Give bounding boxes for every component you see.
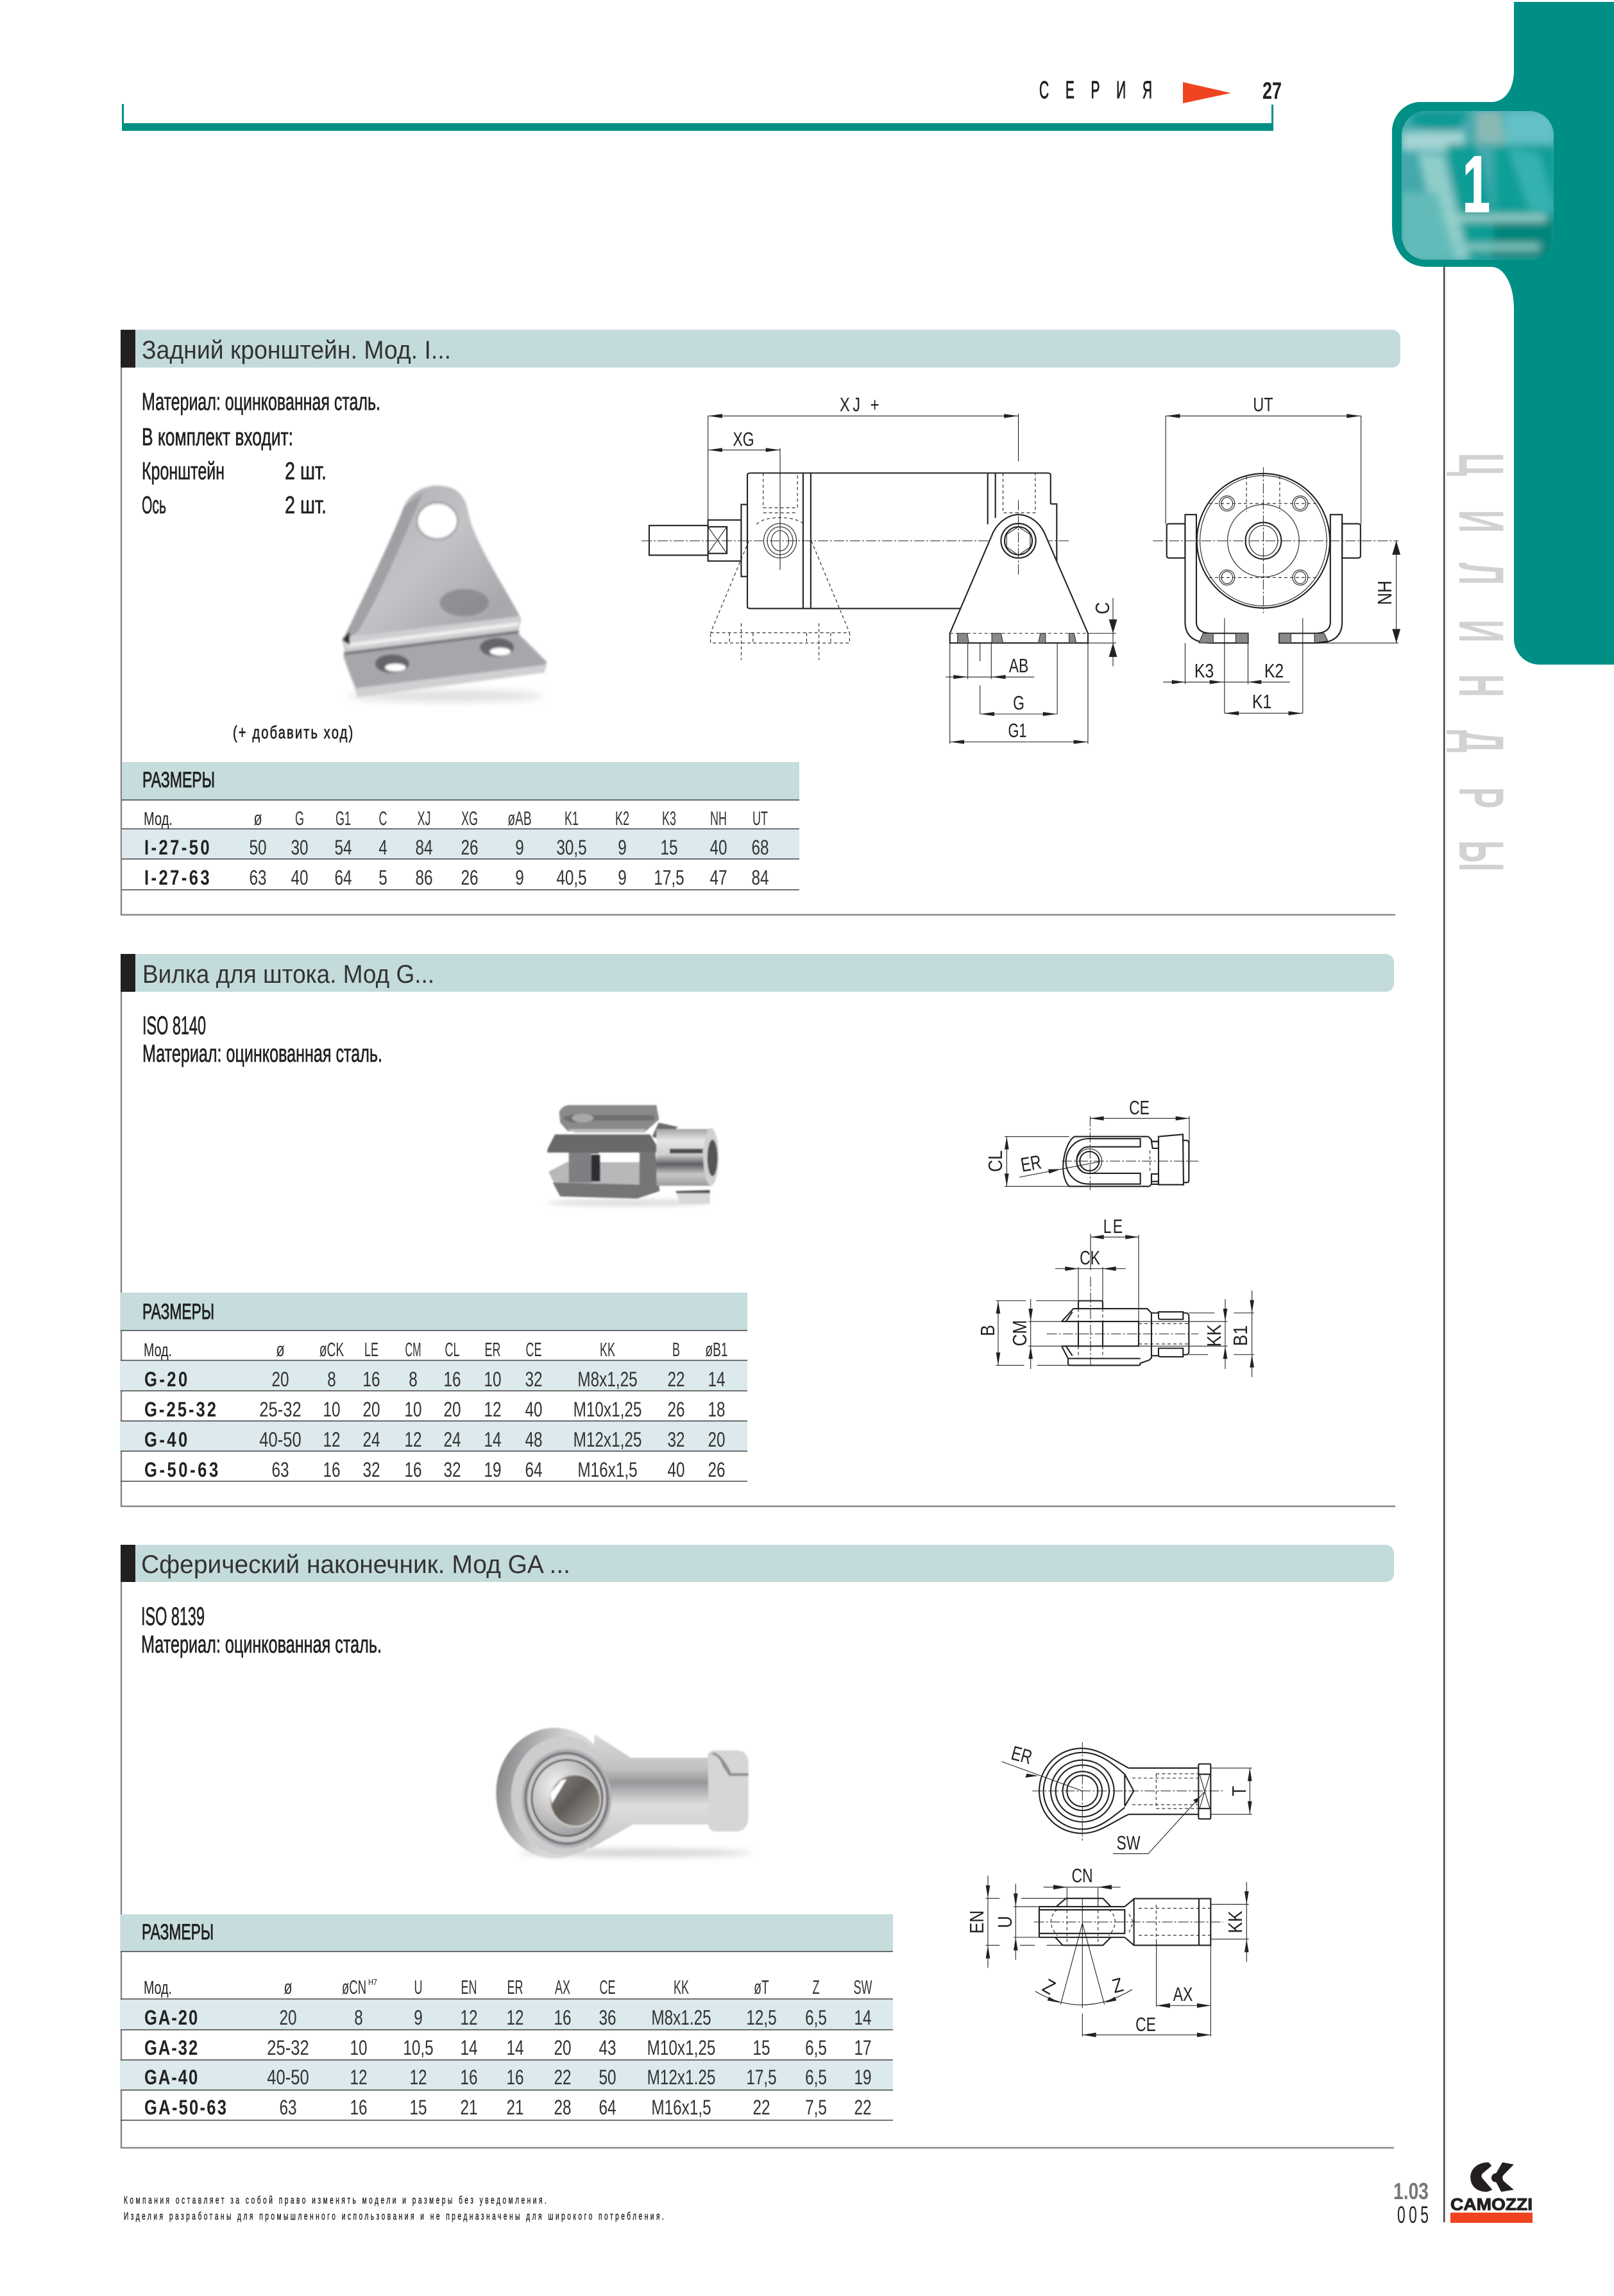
description: В комплект входит: bbox=[142, 424, 293, 451]
table: dimensions I: 15 bbox=[660, 837, 678, 860]
table: dimensions I: 47 bbox=[709, 867, 727, 890]
table: dimensions G: 32 bbox=[443, 1459, 461, 1482]
table: dimensions GA: 12 bbox=[506, 2007, 524, 2030]
table: dimensions GA: M10x1,25 bbox=[647, 2037, 715, 2060]
table: dimensions G bbox=[121, 1293, 747, 1482]
section tab image: teal texture tile bbox=[1402, 111, 1556, 260]
table: dimensions I: XJ bbox=[418, 808, 430, 829]
table: dimensions GA: 16 bbox=[554, 2007, 572, 2030]
description: 2 шт. bbox=[285, 458, 327, 485]
table: dimensions GA: 9 bbox=[414, 2007, 423, 2030]
table: dimensions GA: GA-50-63 bbox=[144, 2096, 226, 2120]
drawing: cylinder with rear bracket: NH bbox=[1374, 581, 1397, 605]
table: dimensions I: C bbox=[379, 808, 387, 829]
table: dimensions G: 12 bbox=[404, 1429, 422, 1452]
heading bar bbox=[121, 954, 1394, 992]
table: dimensions I: 84 bbox=[415, 837, 433, 860]
section tab: teal side tab bbox=[1392, 2, 1614, 665]
table: dimensions I: I-27-63 bbox=[144, 867, 210, 890]
table: dimensions GA: M8x1.25 bbox=[651, 2007, 711, 2030]
drawing: rod end: EN bbox=[966, 1910, 989, 1934]
table: dimensions G: 24 bbox=[362, 1429, 380, 1452]
table: dimensions G: 32 bbox=[362, 1459, 380, 1482]
table: dimensions GA: øCN bbox=[342, 1977, 366, 1998]
table: dimensions GA: 21 bbox=[460, 2096, 478, 2120]
description: Ось bbox=[142, 492, 166, 519]
table: dimensions G: 40-50 bbox=[259, 1429, 302, 1452]
table: dimensions G: 24 bbox=[443, 1429, 461, 1452]
heading: Сферический наконечник. Мод GA ... bbox=[141, 1551, 570, 1579]
table: dimensions G: CL bbox=[445, 1339, 459, 1361]
drawing: clevis: CK bbox=[1080, 1246, 1100, 1269]
drawing: rod end: ER bbox=[1009, 1741, 1035, 1769]
table: dimensions G: Мод. bbox=[144, 1340, 172, 1361]
drawing: rod end: CE bbox=[1135, 2013, 1156, 2036]
header: series number: 27 bbox=[1262, 78, 1282, 104]
description: Материал: оцинкованная сталь. bbox=[142, 389, 380, 416]
table: dimensions GA: 14 bbox=[506, 2037, 524, 2060]
table: dimensions I: G1 bbox=[336, 808, 351, 829]
table: dimensions G: 18 bbox=[708, 1399, 726, 1422]
table: dimensions GA: 36 bbox=[599, 2007, 616, 2030]
table: dimensions GA: 14 bbox=[460, 2037, 478, 2060]
icon: red arrow bbox=[1183, 82, 1231, 103]
heading: Задний кронштейн. Мод. I... bbox=[142, 336, 451, 364]
description: Материал: оцинкованная сталь. bbox=[141, 1631, 382, 1658]
panel: rod clevis bbox=[121, 954, 1395, 1506]
heading marker bbox=[121, 330, 135, 368]
drawing: clevis: ER bbox=[1019, 1150, 1043, 1176]
table: dimensions G: CE bbox=[526, 1339, 541, 1361]
table: dimensions GA: 10 bbox=[350, 2037, 368, 2060]
table: dimensions G: 12 bbox=[323, 1429, 341, 1452]
table: dimensions GA: U bbox=[414, 1977, 422, 1998]
table: dimensions I: 40,5 bbox=[556, 867, 587, 890]
table: dimensions G: 20 bbox=[443, 1399, 461, 1422]
table: dimensions G: 19 bbox=[484, 1459, 502, 1482]
table: dimensions GA: GA-20 bbox=[144, 2007, 198, 2030]
panel outline bbox=[121, 368, 1395, 915]
description bbox=[142, 1012, 382, 1067]
photo: bracket bbox=[342, 486, 547, 701]
table: dimensions I: 30 bbox=[291, 837, 309, 860]
table: dimensions G: 32 bbox=[525, 1368, 543, 1391]
table: dimensions G: M16x1,5 bbox=[577, 1459, 638, 1482]
drawing: rod end: KK bbox=[1225, 1910, 1247, 1934]
table: dimensions GA: KK bbox=[674, 1977, 689, 1998]
table: dimensions I: 5 bbox=[378, 867, 387, 890]
footer: revision: 1.03 bbox=[1393, 2178, 1429, 2204]
description: Кронштейн bbox=[142, 458, 225, 485]
side label: cylinders: ЦИЛИНДРЫ bbox=[1445, 453, 1517, 871]
table: dimensions G: B bbox=[672, 1339, 680, 1361]
table: dimensions I: 68 bbox=[751, 837, 769, 860]
table: dimensions GA bbox=[121, 1914, 893, 2120]
table: dimensions G: 20 bbox=[362, 1399, 380, 1422]
table: dimensions GA: 20 bbox=[279, 2007, 297, 2030]
drawing: rod end: Z bbox=[1039, 1975, 1058, 2000]
drawing: cylinder with rear bracket: G bbox=[1013, 692, 1024, 714]
description: Материал: оцинкованная сталь. bbox=[142, 1041, 382, 1067]
table: dimensions GA: 63 bbox=[279, 2096, 297, 2120]
table: dimensions G: 20 bbox=[271, 1368, 289, 1391]
table: dimensions G: 10 bbox=[484, 1368, 502, 1391]
table: dimensions G: 40 bbox=[667, 1459, 685, 1482]
table: dimensions GA: 6,5 bbox=[805, 2066, 827, 2089]
table: dimensions G: 48 bbox=[525, 1429, 543, 1452]
table: dimensions GA: 21 bbox=[506, 2096, 524, 2120]
table: dimensions I: 30,5 bbox=[556, 837, 587, 860]
table: dimensions G: 26 bbox=[708, 1459, 726, 1482]
table: dimensions G: 22 bbox=[667, 1368, 685, 1391]
table: dimensions I: 50 bbox=[249, 837, 267, 860]
table: dimensions GA: SW bbox=[854, 1977, 872, 1998]
description: ISO 8139 bbox=[141, 1603, 205, 1631]
description: ISO 8140 bbox=[142, 1012, 206, 1040]
drawing: clevis: LE bbox=[1103, 1215, 1124, 1237]
table: dimensions GA: 64 bbox=[599, 2096, 616, 2120]
table: dimensions I: NH bbox=[710, 808, 727, 829]
drawing: cylinder with rear bracket: UT bbox=[1253, 393, 1273, 416]
table: dimensions GA: 15 bbox=[409, 2096, 427, 2120]
table: dimensions GA: 12,5 bbox=[746, 2007, 777, 2030]
table: dimensions GA: CE bbox=[600, 1977, 615, 1998]
side vertical rule bbox=[1443, 267, 1445, 2222]
table: dimensions GA: 20 bbox=[554, 2037, 572, 2060]
footer: page number: 005 bbox=[1397, 2201, 1429, 2228]
drawing: clevis: CL bbox=[985, 1150, 1007, 1172]
footer disclaimer: Компания оставляет за собой право изменять модели и размеры без уведомления. bbox=[124, 2193, 547, 2206]
table: dimensions GA: 50 bbox=[599, 2066, 616, 2089]
table: dimensions GA: øT bbox=[754, 1977, 769, 1998]
table: dimensions GA: 22 bbox=[854, 2096, 872, 2120]
table: dimensions GA: 6,5 bbox=[805, 2037, 827, 2060]
drawing: rod end: Z bbox=[1110, 1974, 1126, 1998]
table: dimensions G: M8x1,25 bbox=[577, 1368, 638, 1391]
table: dimensions G: 16 bbox=[404, 1459, 422, 1482]
drawing: cylinder with rear bracket: C bbox=[1092, 602, 1114, 615]
table: dimensions G: 14 bbox=[708, 1368, 726, 1391]
drawing: clevis: KK bbox=[1203, 1324, 1226, 1347]
drawing: clevis: B1 bbox=[1230, 1325, 1252, 1346]
table: dimensions GA: 40-50 bbox=[267, 2066, 309, 2089]
table: dimensions GA: 16 bbox=[350, 2096, 368, 2120]
table: dimensions I: øAB bbox=[507, 808, 532, 829]
table: dimensions G: 12 bbox=[484, 1399, 502, 1422]
table: dimensions G: 63 bbox=[271, 1459, 289, 1482]
table: dimensions GA: 19 bbox=[854, 2066, 872, 2089]
table: dimensions GA: 14 bbox=[854, 2007, 872, 2030]
drawing: cylinder with rear bracket: K1 bbox=[1252, 690, 1271, 713]
header: series label: СЕРИЯ bbox=[1039, 77, 1152, 104]
table: dimensions GA: 12 bbox=[350, 2066, 368, 2089]
panel: rear bracket bbox=[121, 330, 1400, 915]
drawing: rod end: AX bbox=[1173, 1983, 1193, 2005]
table: dimensions I: K3 bbox=[662, 808, 676, 829]
table: dimensions I: 40 bbox=[291, 867, 309, 890]
table: dimensions GA: ø bbox=[284, 1976, 293, 1998]
table: dimensions GA: M16x1,5 bbox=[651, 2096, 711, 2120]
table: dimensions G: 8 bbox=[327, 1368, 336, 1391]
table: dimensions G: 10 bbox=[404, 1399, 422, 1422]
table: dimensions I: 9 bbox=[618, 867, 627, 890]
table: dimensions GA: 22 bbox=[554, 2066, 572, 2089]
description: 2 шт. bbox=[285, 492, 327, 519]
table: dimensions I: 26 bbox=[461, 837, 479, 860]
table: dimensions GA: Мод. bbox=[144, 1978, 172, 1998]
table: dimensions GA: 17,5 bbox=[746, 2066, 777, 2089]
section number: 1 bbox=[1463, 140, 1490, 228]
panel: spherical rod end bbox=[121, 1545, 1394, 2148]
table: dimensions GA: 7,5 bbox=[805, 2096, 827, 2120]
table: dimensions GA: 8 bbox=[354, 2007, 363, 2030]
table: dimensions G: 10 bbox=[323, 1399, 341, 1422]
table: dimensions G: M12x1,25 bbox=[573, 1429, 641, 1452]
table: dimensions I: РАЗМЕРЫ bbox=[142, 768, 215, 792]
table: dimensions G: 40 bbox=[525, 1399, 543, 1422]
photo: rod end bbox=[496, 1728, 751, 1858]
table: dimensions GA: 22 bbox=[752, 2096, 770, 2120]
heading bar bbox=[121, 1545, 1394, 1582]
table: dimensions GA: 17 bbox=[854, 2037, 872, 2060]
table: dimensions I: 40 bbox=[709, 837, 727, 860]
table: dimensions GA: GA-32 bbox=[144, 2037, 198, 2060]
table: dimensions I: UT bbox=[752, 808, 768, 829]
table: dimensions G: øCK bbox=[319, 1339, 344, 1361]
table: dimensions I: Мод. bbox=[144, 809, 173, 829]
header rule bbox=[122, 104, 1273, 131]
table: dimensions G: ø bbox=[276, 1338, 285, 1361]
table: dimensions G: KK bbox=[600, 1339, 615, 1361]
table: dimensions I: 63 bbox=[249, 867, 267, 890]
drawing: rod end: U bbox=[994, 1916, 1017, 1928]
photo: clevis bbox=[547, 1105, 718, 1206]
table: dimensions G: CM bbox=[405, 1339, 421, 1361]
table: dimensions G: 16 bbox=[362, 1368, 380, 1391]
footer disclaimer bbox=[124, 2193, 664, 2222]
table: dimensions G: ER bbox=[485, 1339, 500, 1361]
table: dimensions GA: M12x1.25 bbox=[647, 2066, 715, 2089]
table: dimensions I: 9 bbox=[515, 867, 524, 890]
table: dimensions GA: 25-32 bbox=[267, 2037, 309, 2060]
table: dimensions I: G bbox=[295, 808, 304, 829]
table: dimensions G: LE bbox=[364, 1339, 378, 1361]
table: dimensions I: 9 bbox=[618, 837, 627, 860]
table: dimensions GA: AX bbox=[555, 1977, 570, 1998]
table: dimensions I bbox=[122, 762, 799, 890]
table: dimensions I: XG bbox=[461, 808, 478, 829]
drawing: clevis: CM bbox=[1009, 1320, 1032, 1346]
table: dimensions GA: 16 bbox=[506, 2066, 524, 2089]
logo: Camozzi: CAMOZZI bbox=[1450, 2195, 1533, 2214]
table: dimensions G: РАЗМЕРЫ bbox=[142, 1300, 214, 1324]
table: dimensions I: 9 bbox=[515, 837, 524, 860]
table: dimensions GA: 12 bbox=[409, 2066, 427, 2089]
table: dimensions G: 16 bbox=[323, 1459, 341, 1482]
table: dimensions GA: 10,5 bbox=[403, 2037, 434, 2060]
drawing: rod end: CN bbox=[1071, 1864, 1093, 1887]
table: dimensions GA: EN bbox=[461, 1977, 477, 1998]
table: dimensions G: øB1 bbox=[705, 1339, 728, 1361]
table: dimensions I: K2 bbox=[615, 808, 629, 829]
table: dimensions G: 32 bbox=[667, 1429, 685, 1452]
table: dimensions G: 64 bbox=[525, 1459, 543, 1482]
table: dimensions GA: РАЗМЕРЫ bbox=[142, 1920, 214, 1944]
drawing: cylinder with rear bracket bbox=[641, 393, 1400, 744]
table: dimensions G: 8 bbox=[409, 1368, 418, 1391]
table: dimensions G: G-25-32 bbox=[144, 1399, 216, 1422]
drawing: cylinder with rear bracket: K2 bbox=[1264, 659, 1284, 682]
logo: Camozzi bbox=[1450, 2163, 1533, 2223]
table: dimensions G: 20 bbox=[708, 1429, 726, 1452]
table: dimensions G: M10x1,25 bbox=[573, 1399, 641, 1422]
table: dimensions G: 16 bbox=[443, 1368, 461, 1391]
drawing: cylinder with rear bracket: XG bbox=[733, 428, 754, 450]
drawing: clevis: B bbox=[977, 1325, 999, 1336]
table: dimensions GA: 43 bbox=[599, 2037, 616, 2060]
drawing: cylinder with rear bracket: K3 bbox=[1194, 659, 1214, 682]
drawing: cylinder with rear bracket: G1 bbox=[1008, 719, 1026, 742]
table: dimensions G: G-40 bbox=[144, 1429, 187, 1452]
table: dimensions GA: 16 bbox=[460, 2066, 478, 2089]
table: dimensions GA: Z bbox=[813, 1977, 819, 1998]
table: dimensions G: 25-32 bbox=[259, 1399, 302, 1422]
table: dimensions GA: 6,5 bbox=[805, 2007, 827, 2030]
table: dimensions I: 64 bbox=[334, 867, 352, 890]
table: dimensions GA: ER bbox=[507, 1977, 523, 1998]
table: dimensions I: 26 bbox=[461, 867, 479, 890]
table: dimensions I: K1 bbox=[565, 808, 579, 829]
table: dimensions GA: GA-40 bbox=[144, 2066, 198, 2089]
note: add stroke: (+ добавить ход) bbox=[233, 723, 353, 743]
table: dimensions G: 14 bbox=[484, 1429, 502, 1452]
panel outline bbox=[121, 1582, 1394, 2148]
table: dimensions G: G-50-63 bbox=[144, 1459, 218, 1482]
table: dimensions G: 26 bbox=[667, 1399, 685, 1422]
table: dimensions I: 86 bbox=[415, 867, 433, 890]
description bbox=[141, 1603, 382, 1658]
heading: Вилка для штока. Мод G... bbox=[142, 960, 434, 989]
drawing: cylinder with rear bracket: XJ + bbox=[840, 393, 882, 416]
footer disclaimer: Изделия разработаны для промышленного использования и не предназначены для широкого потребления. bbox=[124, 2209, 664, 2222]
drawing: rod end bbox=[966, 1741, 1252, 2037]
drawing: clevis bbox=[977, 1096, 1254, 1377]
table: dimensions GA: H7 bbox=[368, 1977, 377, 1987]
table: dimensions GA: 28 bbox=[554, 2096, 572, 2120]
table: dimensions I: 54 bbox=[334, 837, 352, 860]
table: dimensions I: 84 bbox=[751, 867, 769, 890]
drawing: rod end: SW bbox=[1117, 1832, 1141, 1854]
table: dimensions I: 17,5 bbox=[654, 867, 684, 890]
drawing: clevis: CE bbox=[1129, 1096, 1150, 1119]
table: dimensions I: 4 bbox=[378, 837, 387, 860]
drawing: rod end: T bbox=[1228, 1786, 1251, 1796]
table: dimensions I: I-27-50 bbox=[144, 837, 210, 860]
drawing: cylinder with rear bracket: AB bbox=[1009, 654, 1028, 677]
table: dimensions G: G-20 bbox=[144, 1368, 187, 1391]
table: dimensions GA: 15 bbox=[752, 2037, 770, 2060]
heading bar bbox=[121, 330, 1400, 368]
heading marker bbox=[121, 954, 135, 992]
table: dimensions GA: 12 bbox=[460, 2007, 478, 2030]
table: dimensions I: ø bbox=[253, 807, 262, 829]
heading marker bbox=[121, 1545, 135, 1582]
description bbox=[142, 389, 380, 519]
panel outline bbox=[121, 992, 1395, 1506]
